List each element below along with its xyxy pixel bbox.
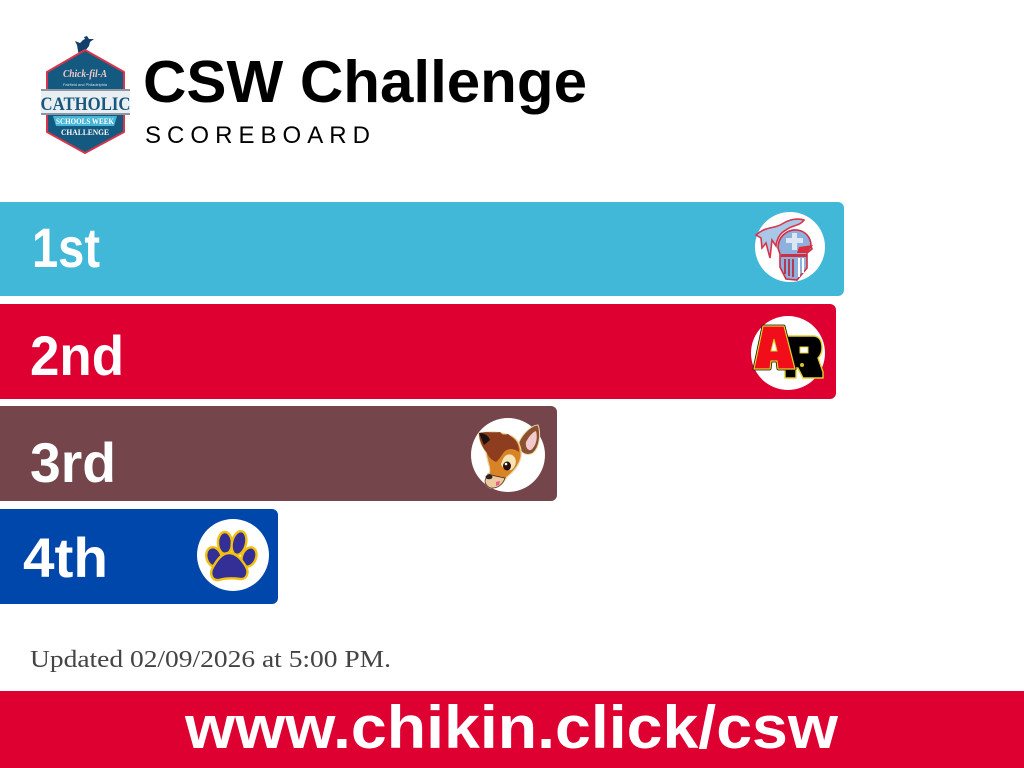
label: 1st: 1st: [32, 216, 100, 279]
label: 2nd: 2nd: [30, 324, 124, 387]
chick-fil-a wordmark: Chick-fil-A: [63, 69, 107, 80]
label: 4th: 4th: [23, 526, 108, 589]
icon: knight helmet: [755, 212, 825, 282]
CHALLENGE: CHALLENGE: [61, 128, 109, 137]
footer url: www.chikin.click/csw: [184, 694, 838, 761]
CATHOLIC: CATHOLIC: [40, 94, 130, 115]
update timestamp: Updated 02/09/2026 at 5:00 PM.: [30, 647, 391, 673]
bar: 2nd place: [0, 304, 836, 399]
subtitle: SCOREBOARD: [145, 122, 370, 149]
schools week band: [53, 116, 117, 126]
label: 3rd: 3rd: [30, 431, 116, 494]
SCHOOLS WEEK: SCHOOLS WEEK: [56, 117, 115, 126]
icon: fawn head: [471, 418, 545, 492]
icon: AR monogram: [751, 316, 825, 390]
bar: 3rd place: [0, 406, 557, 501]
badge shield: [47, 50, 124, 153]
sponsor line: Fairfield and Philadelphia: [63, 83, 107, 87]
icon: dove: [75, 36, 94, 56]
logo: Catholic Schools Week Challenge badge: [40, 36, 130, 153]
title: CSW Challenge: [143, 49, 587, 115]
footer banner: [0, 691, 1024, 768]
banner rules: [41, 89, 130, 91]
bar: 4th place: [0, 509, 278, 604]
bar: 1st place: [0, 202, 844, 296]
icon: paw print: [197, 519, 269, 591]
